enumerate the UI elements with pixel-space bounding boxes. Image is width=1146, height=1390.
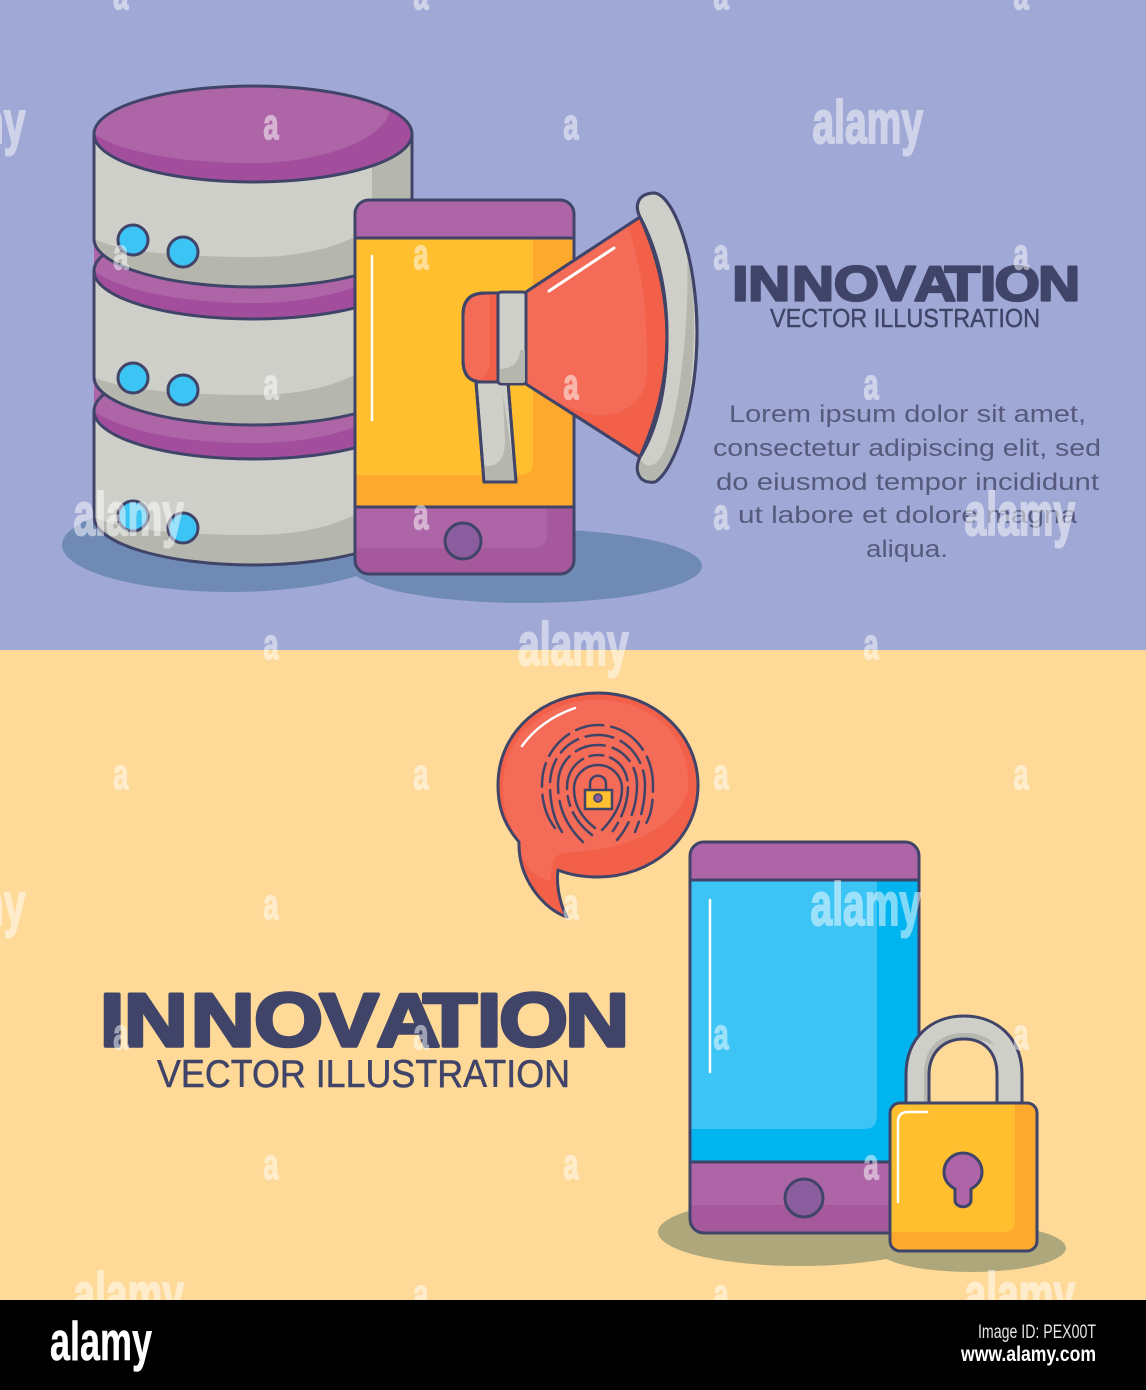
icon: database shadow bbox=[62, 498, 702, 603]
watermarks: a bbox=[563, 879, 579, 929]
text block: lorem ipsum bbox=[713, 401, 1101, 563]
watermarks: a bbox=[1014, 1009, 1029, 1059]
watermarks: a bbox=[263, 1139, 279, 1189]
watermarks: a bbox=[1014, 749, 1029, 799]
footer: alamy logo: alamy bbox=[50, 1310, 152, 1372]
watermarks: a bbox=[263, 619, 279, 669]
watermarks: a bbox=[113, 229, 129, 279]
heading: top innovation: INNOVATION bbox=[732, 257, 1080, 311]
watermarks: a bbox=[713, 1009, 729, 1059]
watermarks: a bbox=[263, 99, 279, 149]
middle disc bbox=[94, 363, 412, 459]
watermarks: a bbox=[864, 1139, 879, 1189]
top lid bbox=[94, 86, 412, 182]
footer: image id: Image ID: PEX00T bbox=[978, 1322, 1096, 1343]
watermarks: a bbox=[563, 99, 579, 149]
middle cylinder bbox=[94, 271, 412, 425]
watermarks: a bbox=[713, 229, 729, 279]
icon: padlock bbox=[890, 1016, 1037, 1251]
watermarks: a bbox=[1014, 229, 1029, 279]
watermarks: a bbox=[713, 1269, 729, 1319]
watermarks: alamy bbox=[811, 870, 921, 938]
icon: speech bubble with fingerprint bbox=[498, 693, 698, 917]
top cylinder bbox=[94, 134, 412, 287]
watermarks: alamy bbox=[73, 480, 184, 548]
subheading: bottom vector illustration: VECTOR ILLUSTRATION bbox=[157, 1053, 570, 1096]
watermarks: a bbox=[413, 749, 429, 799]
watermarks: alamy bbox=[812, 88, 923, 156]
watermarks: a bbox=[713, 489, 729, 539]
subheading: top vector illustration: VECTOR ILLUSTRATION bbox=[770, 303, 1040, 333]
panel: top purple background bbox=[0, 0, 1146, 650]
watermarks: a bbox=[113, 749, 129, 799]
watermarks: a bbox=[413, 1009, 429, 1059]
bottom cylinder bbox=[94, 411, 412, 565]
text block: lorem ipsum: ut labore et dolore magna bbox=[738, 502, 1078, 529]
text block: lorem ipsum: do eiusmod tempor incididunt bbox=[716, 469, 1099, 496]
watermarks: a bbox=[413, 489, 429, 539]
icon: shadow under phone and lock bbox=[658, 1198, 1066, 1272]
text block: lorem ipsum: consectetur adipiscing elit, sed bbox=[713, 435, 1101, 462]
watermarks: alamy bbox=[518, 610, 629, 678]
watermarks: a bbox=[413, 1269, 429, 1319]
watermarks: a bbox=[713, 749, 729, 799]
watermarks: alamy bbox=[73, 1260, 184, 1328]
watermarks: a bbox=[864, 619, 879, 669]
watermarks: a bbox=[113, 1009, 129, 1059]
watermarks: alamy bbox=[965, 1260, 1075, 1328]
icon: megaphone bbox=[463, 193, 697, 482]
icon: database server bbox=[94, 86, 412, 565]
text block: lorem ipsum: aliqua. bbox=[866, 536, 948, 563]
watermarks: a bbox=[263, 879, 279, 929]
icon: mini padlock bbox=[585, 776, 612, 809]
icon: smartphone blue bbox=[690, 842, 919, 1233]
upper disc bbox=[94, 223, 412, 319]
heading: bottom innovation: INNOVATION bbox=[100, 979, 629, 1062]
watermarks: a bbox=[263, 359, 279, 409]
status lights bbox=[118, 225, 198, 543]
watermarks: a bbox=[563, 1139, 579, 1189]
watermarks: a bbox=[413, 229, 429, 279]
watermarks: a bbox=[864, 359, 879, 409]
icon: smartphone yellow bbox=[355, 200, 574, 574]
panel: black footer bbox=[0, 1300, 1146, 1390]
footer: website: www.alamy.com bbox=[960, 1343, 1096, 1366]
panel: bottom cream background bbox=[0, 650, 1146, 1300]
watermarks: a bbox=[563, 359, 579, 409]
text block: lorem ipsum: Lorem ipsum dolor sit amet, bbox=[729, 401, 1086, 428]
watermarks: alamy bbox=[965, 480, 1075, 548]
icon: fingerprint rings bbox=[542, 725, 653, 842]
